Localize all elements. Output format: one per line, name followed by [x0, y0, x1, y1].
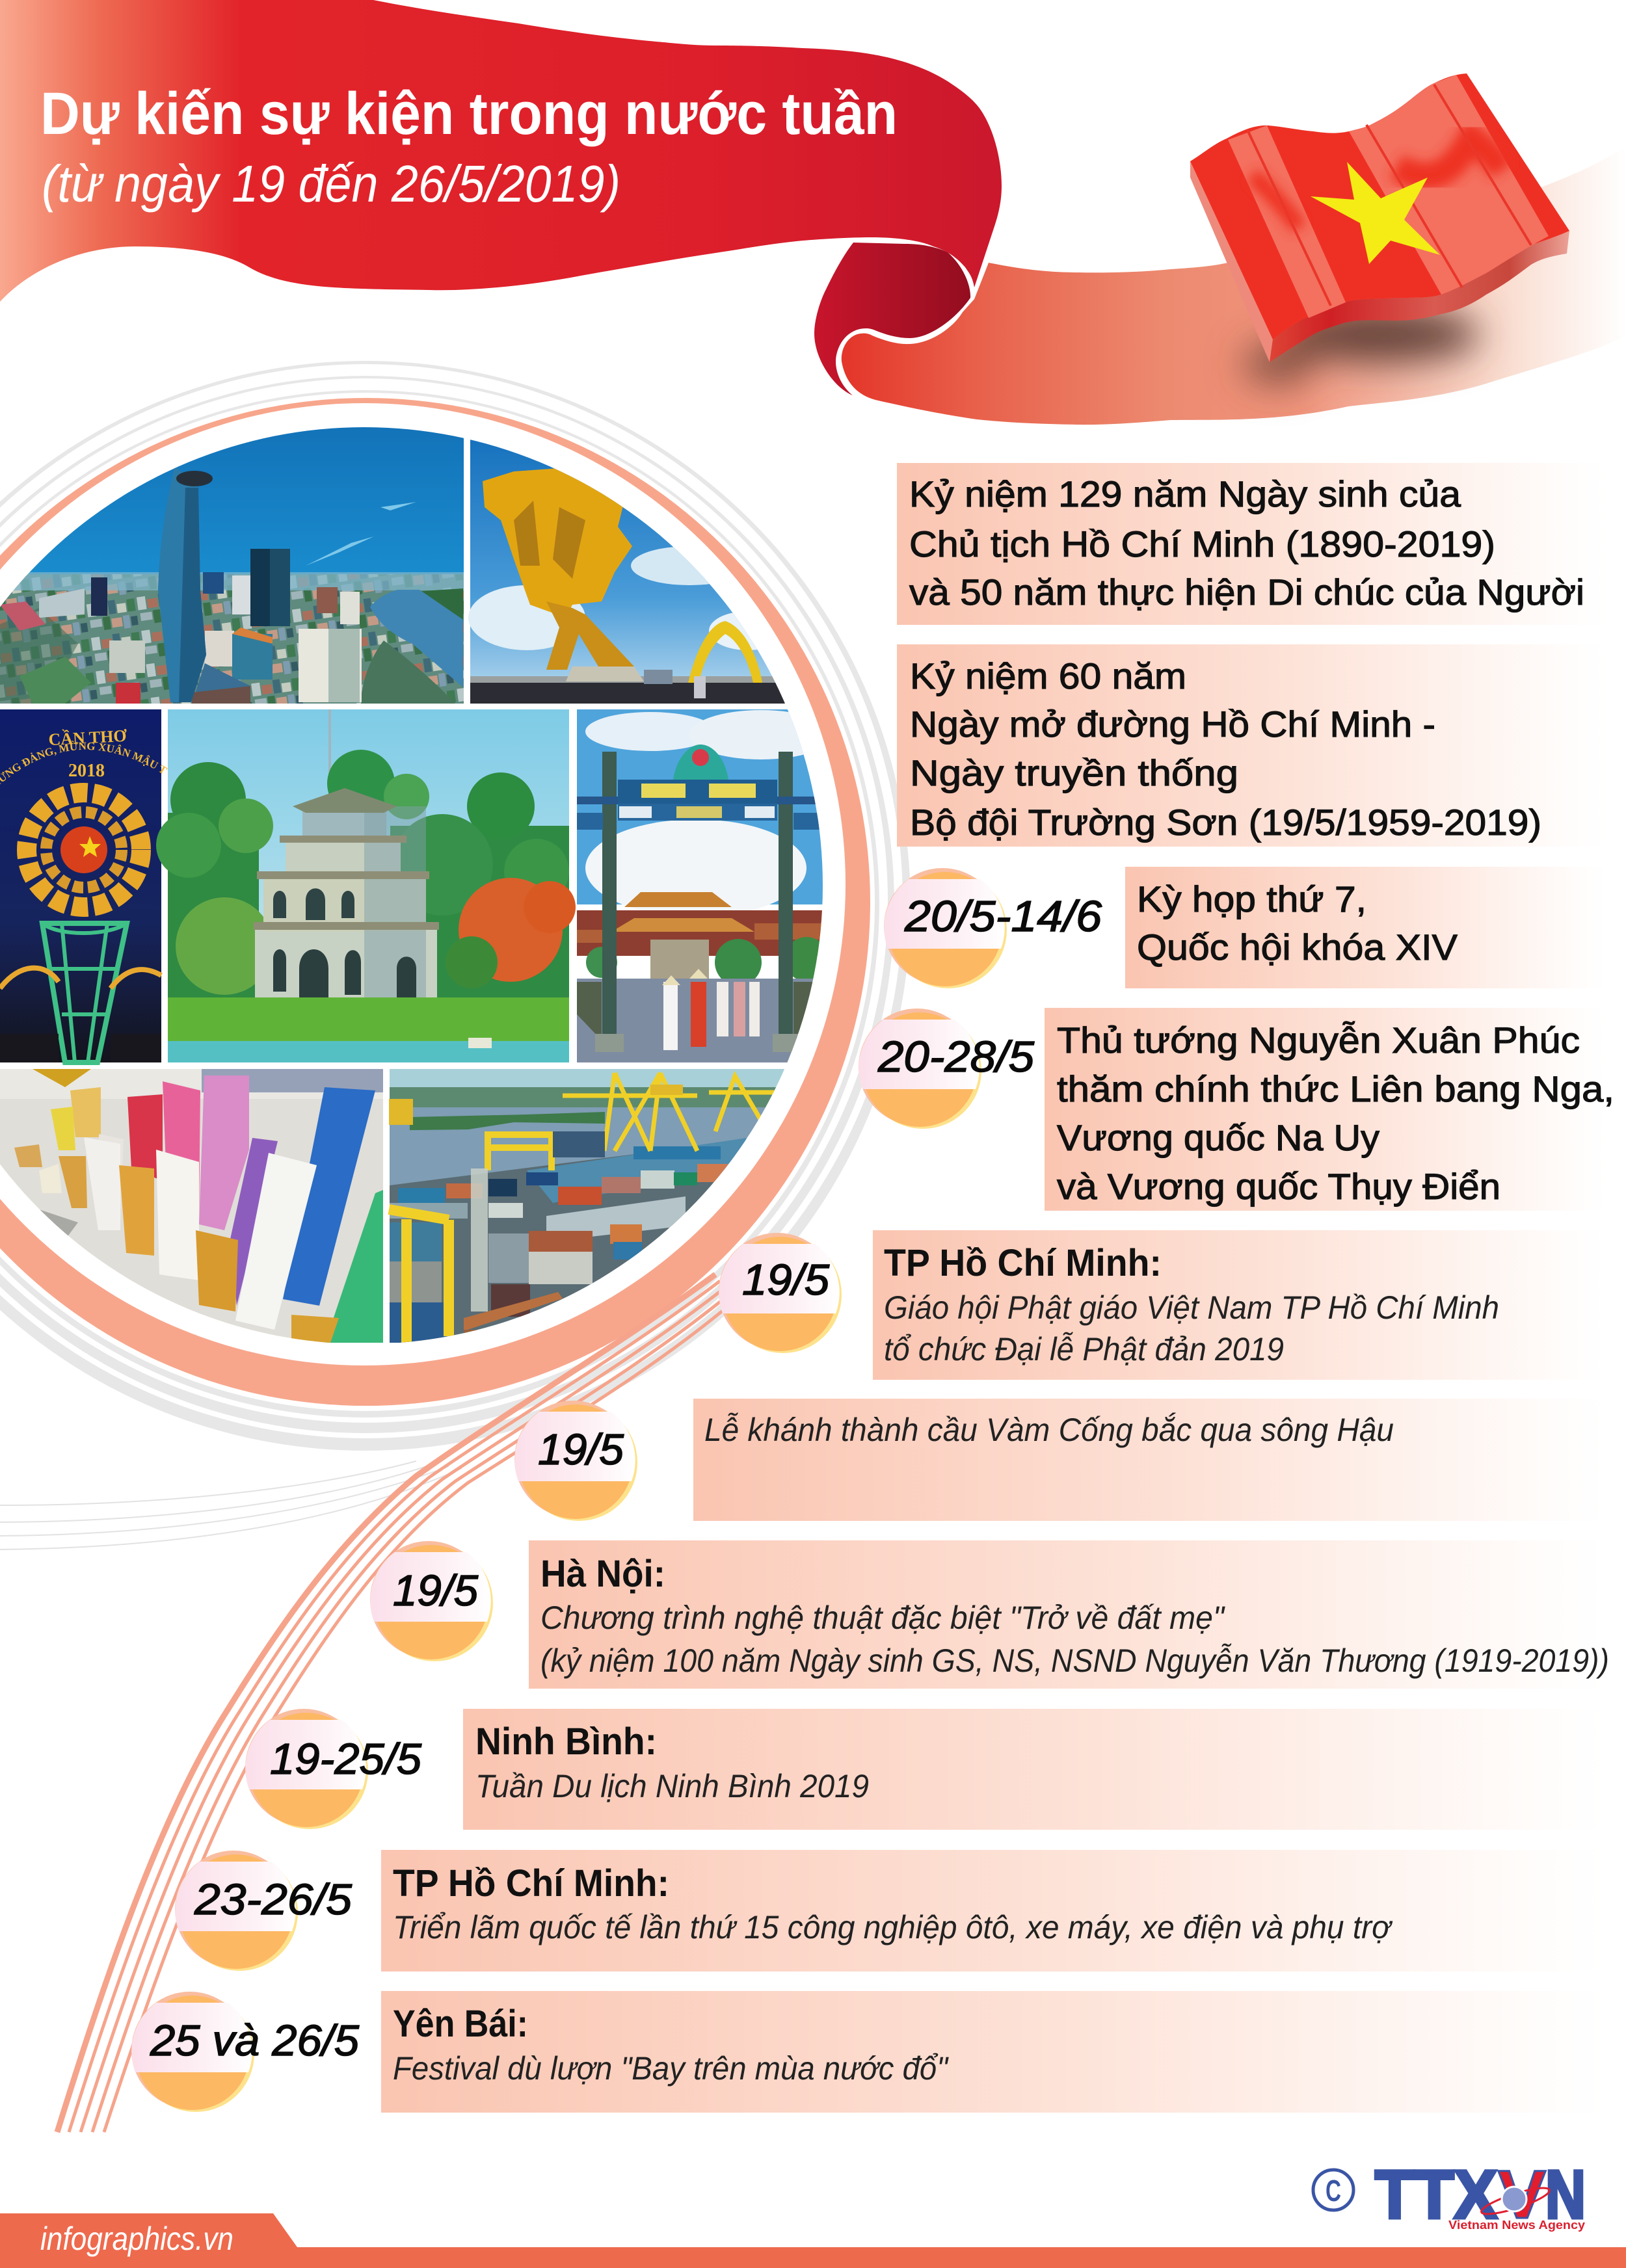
- logo: TTXVN: N: [1545, 2157, 1586, 2233]
- photo: Turtle Tower, Hoan Kiem lake: [156, 709, 576, 1062]
- text: Prime Minister visit: Vương quốc Na Uy: [1057, 1117, 1379, 1158]
- heading: Yen Bai: Yên Bái:: [393, 2003, 528, 2045]
- photo: Ho Chi Minh City skyline: [0, 423, 464, 704]
- heading: Ninh Binh: Ninh Bình:: [475, 1721, 657, 1763]
- icon: Vietnamese flag: [1190, 73, 1569, 362]
- date badge: 19-25/5: [245, 1709, 422, 1829]
- date badge: 23-26/5: [175, 1851, 353, 1971]
- heading: TP Ho Chi Minh: TP Hồ Chí Minh:: [393, 1862, 669, 1905]
- text: Buddha birthday: Giáo hội Phật giáo Việt Nam TP Hồ Chí Minh: [884, 1289, 1499, 1326]
- title: Dự kiến sự kiện trong nước tuần: [40, 81, 898, 147]
- photo: Da Nang Dragon Bridge: [468, 440, 785, 704]
- logo: TTXVN: V: [1498, 2157, 1546, 2233]
- heading: TP Ho Chi Minh: TP Hồ Chí Minh:: [884, 1242, 1162, 1284]
- container stacks: [390, 1138, 845, 1343]
- text: National Assembly session: Kỳ họp thứ 7,: [1137, 878, 1366, 919]
- salmon ring: [0, 398, 870, 1406]
- text: art programme: Chương trình nghệ thuật đặc biệt "Trở về đất mẹ": [540, 1600, 1225, 1636]
- date badge: 20-28/5: 20-28/5: [877, 1033, 1035, 1081]
- panel: event 7 box: [529, 1540, 1609, 1689]
- icon: yellow star: [1311, 162, 1440, 264]
- thin grey lines: [0, 1461, 462, 1549]
- panel: event 1 box: [897, 463, 1606, 625]
- text: Prime Minister visit: Thủ tướng Nguyễn Xuân Phúc: [1057, 1020, 1580, 1061]
- text: National Assembly session: Quốc hội khóa XIV: [1137, 927, 1458, 968]
- logo: TTXVN: Vietnam News Agency: [1448, 2219, 1585, 2232]
- footer text: infographics.vn: [40, 2221, 233, 2257]
- panel: event 5 box: [873, 1230, 1606, 1380]
- text: Ho Chi Minh trail: Bộ đội Trường Sơn (19/5/1959-2019): [910, 802, 1541, 843]
- panel: event 2 box: [897, 644, 1606, 847]
- logo: copyright mark: [1313, 2170, 1353, 2210]
- text: National Assembly session: [1137, 878, 1458, 968]
- text: Ho Chi Minh trail: Ngày mở đường Hồ Chí Minh -: [910, 704, 1435, 745]
- yellow gantries: [389, 1073, 780, 1343]
- logo: TTXVN: TTX: [1375, 2157, 1497, 2233]
- date badge: 19/5 A: 19/5: [742, 1256, 830, 1304]
- date badge: 25 va 26/5: 25 và 26/5: [150, 2016, 360, 2065]
- date badge: 19/5 B: [514, 1401, 637, 1521]
- text: Buddha birthday: tổ chức Đại lễ Phật đản 2019: [884, 1331, 1284, 1367]
- date badge: 23-26/5: 23-26/5: [194, 1875, 353, 1924]
- photo: Hue imperial gate: [577, 709, 837, 1062]
- photo collage circle: [0, 427, 823, 1343]
- photo: bar chart still life: [0, 1069, 383, 1343]
- panel: event 4 box: [1045, 1008, 1614, 1211]
- photo: Can Tho festive lights: [0, 709, 168, 1065]
- ribbon fold: [814, 243, 970, 395]
- date badge: 19/5 C: [370, 1541, 493, 1661]
- text: Prime Minister visit: và Vương quốc Thụy Điển: [1057, 1166, 1500, 1207]
- date badge: 20/5-14/6: 20/5-14/6: [904, 892, 1102, 941]
- text: Ho Chi Minh birthday: Chủ tịch Hồ Chí Minh (1890-2019): [909, 523, 1495, 564]
- panel: event 6 box: [693, 1399, 1606, 1521]
- date badge: 20/5-14/6: [884, 868, 1102, 988]
- text: Ho Chi Minh birthday: Kỷ niệm 129 năm Ngày sinh của: [909, 473, 1461, 514]
- photo: container port: [389, 1069, 845, 1343]
- flag shadow: [1242, 308, 1480, 385]
- footer bar: [0, 2213, 1626, 2268]
- logo: copyright mark: C: [1326, 2174, 1341, 2208]
- text: Ho Chi Minh birthday: và 50 năm thực hiện Di chúc của Người: [909, 572, 1584, 613]
- text: Ho Chi Minh trail: Ngày truyền thống: [910, 752, 1238, 793]
- subtitle: (từ ngày 19 đến 26/5/2019): [42, 155, 620, 213]
- salmon sweep lines: [57, 1274, 735, 2132]
- text: Vam Cong bridge: Lễ khánh thành cầu Vàm Cống bắc qua sông Hậu: [704, 1412, 1394, 1448]
- text: Buddha birthday: [884, 1289, 1499, 1367]
- Turtle Tower: [254, 788, 439, 1007]
- date badge: 19/5 A: [719, 1233, 842, 1353]
- date badge: 20-28/5: [859, 1009, 1035, 1129]
- text: Ho Chi Minh trail: [910, 655, 1541, 843]
- text: art programme: [540, 1600, 1609, 1679]
- date badge: 19/5 C: 19/5: [393, 1566, 479, 1615]
- panel: event 3 box: [1125, 867, 1606, 988]
- text: tourism week: Tuần Du lịch Ninh Bình 2019: [475, 1768, 869, 1804]
- date badge: 25 va 26/5: [131, 1992, 360, 2112]
- logo: TTXVN: [1375, 2157, 1586, 2233]
- photo text: Can Tho: CẦN THƠ: [48, 726, 127, 749]
- grey orbit rings: [0, 361, 911, 1451]
- date badge: 19-25/5: 19-25/5: [270, 1735, 422, 1784]
- text: Ho Chi Minh trail: Kỷ niệm 60 năm: [910, 655, 1186, 696]
- text: Prime Minister visit: thăm chính thức Liên bang Nga,: [1057, 1068, 1614, 1109]
- white disc: [0, 403, 846, 1365]
- panel: event 8 box: [463, 1709, 1606, 1830]
- panel: event 10 box: [381, 1991, 1606, 2113]
- photo text: year: 2018: [68, 761, 105, 781]
- text: Prime Minister visit: [1057, 1020, 1614, 1207]
- panel: event 9 box: [381, 1850, 1606, 1971]
- ribbon tail: [842, 146, 1626, 425]
- text: auto expo: Triển lãm quốc tế lần thứ 15 công nghiệp ôtô, xe máy, xe điện và phụ trợ: [393, 1909, 1393, 1945]
- photo: women in ao dai: [662, 969, 760, 1050]
- red banner: [0, 0, 1002, 302]
- heading: Ha Noi: Hà Nội:: [540, 1553, 665, 1595]
- date badge: 19/5 B: 19/5: [538, 1425, 624, 1474]
- text: paragliding festival: Festival dù lượn "Bay trên mùa nước đổ": [393, 2050, 949, 2087]
- text: Ho Chi Minh birthday: [909, 473, 1584, 613]
